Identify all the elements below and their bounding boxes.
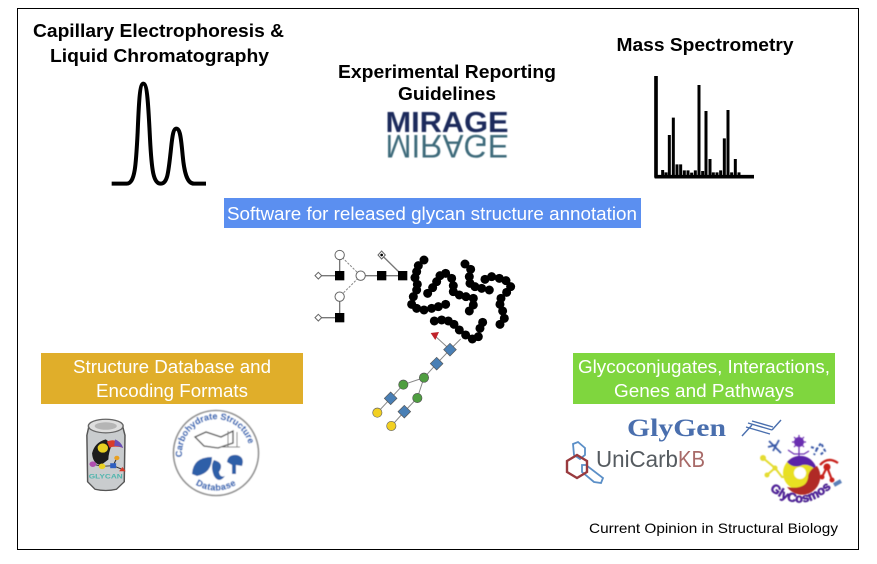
logo: carbohydrate structure database bbox=[172, 409, 260, 497]
logo: MIRAGE: MIRAGE bbox=[386, 128, 508, 164]
logo: GlyGen: GlyGen bbox=[627, 415, 726, 442]
logo: GlyCosmos bbox=[759, 434, 842, 504]
banner: structure database and encoding formats: Encoding Formats bbox=[96, 381, 248, 401]
logo: UniCarbKB bbox=[567, 442, 705, 483]
logo: carbohydrate structure database: Database bbox=[195, 478, 236, 492]
heading: capillary electrophoresis and liquid chromatography: Capillary Electrophoresis & bbox=[33, 21, 284, 41]
heading: experimental reporting guidelines bbox=[338, 62, 556, 104]
logo: glycan can: GLYCAN bbox=[89, 472, 123, 481]
logo: glycan can bbox=[87, 419, 126, 490]
banner: software for released glycan structure annotation bbox=[224, 198, 641, 228]
coloured N-glycan bbox=[373, 332, 461, 431]
logo: carbohydrate structure database: Carbohydrate Structure bbox=[174, 412, 254, 458]
banner: software for released glycan structure annotation: Software for released glycan structure annotation bbox=[227, 204, 637, 224]
heading: capillary electrophoresis and liquid chromatography bbox=[33, 21, 284, 66]
banner: glycoconjugates, interactions, genes and pathways: Genes and Pathways bbox=[614, 381, 794, 401]
logo: MIRAGE: MIRAGE bbox=[386, 107, 508, 139]
heading: experimental reporting guidelines: Experimental Reporting bbox=[338, 62, 556, 82]
banner: structure database and encoding formats: Structure Database and bbox=[73, 357, 271, 377]
heading: capillary electrophoresis and liquid chromatography: Liquid Chromatography bbox=[50, 46, 269, 66]
chart: mass spectrum bbox=[655, 76, 754, 178]
logo: GlyCosmos: GlyCosmos bbox=[770, 482, 832, 504]
banner: structure database and encoding formats bbox=[41, 353, 303, 404]
logo: UniCarbKB: KB bbox=[678, 446, 705, 472]
banner: glycoconjugates, interactions, genes and pathways bbox=[573, 353, 835, 404]
banner: glycoconjugates, interactions, genes and pathways: Glycoconjugates, Interactions, bbox=[578, 357, 830, 377]
chart: chromatography peaks bbox=[112, 84, 206, 184]
logo: UniCarbKB: UniCarb bbox=[596, 446, 678, 472]
logo: GlyGen bbox=[627, 415, 781, 442]
protein bead chain bbox=[407, 255, 515, 343]
diagram: glycan and protein bbox=[315, 250, 515, 431]
heading: experimental reporting guidelines: Guidelines bbox=[398, 84, 496, 104]
logo: MIRAGE bbox=[386, 107, 508, 164]
caption: Current Opinion in Structural Biology bbox=[589, 520, 838, 536]
black glycan structure bbox=[315, 250, 407, 322]
heading: mass spectrometry: Mass Spectrometry bbox=[616, 35, 794, 55]
